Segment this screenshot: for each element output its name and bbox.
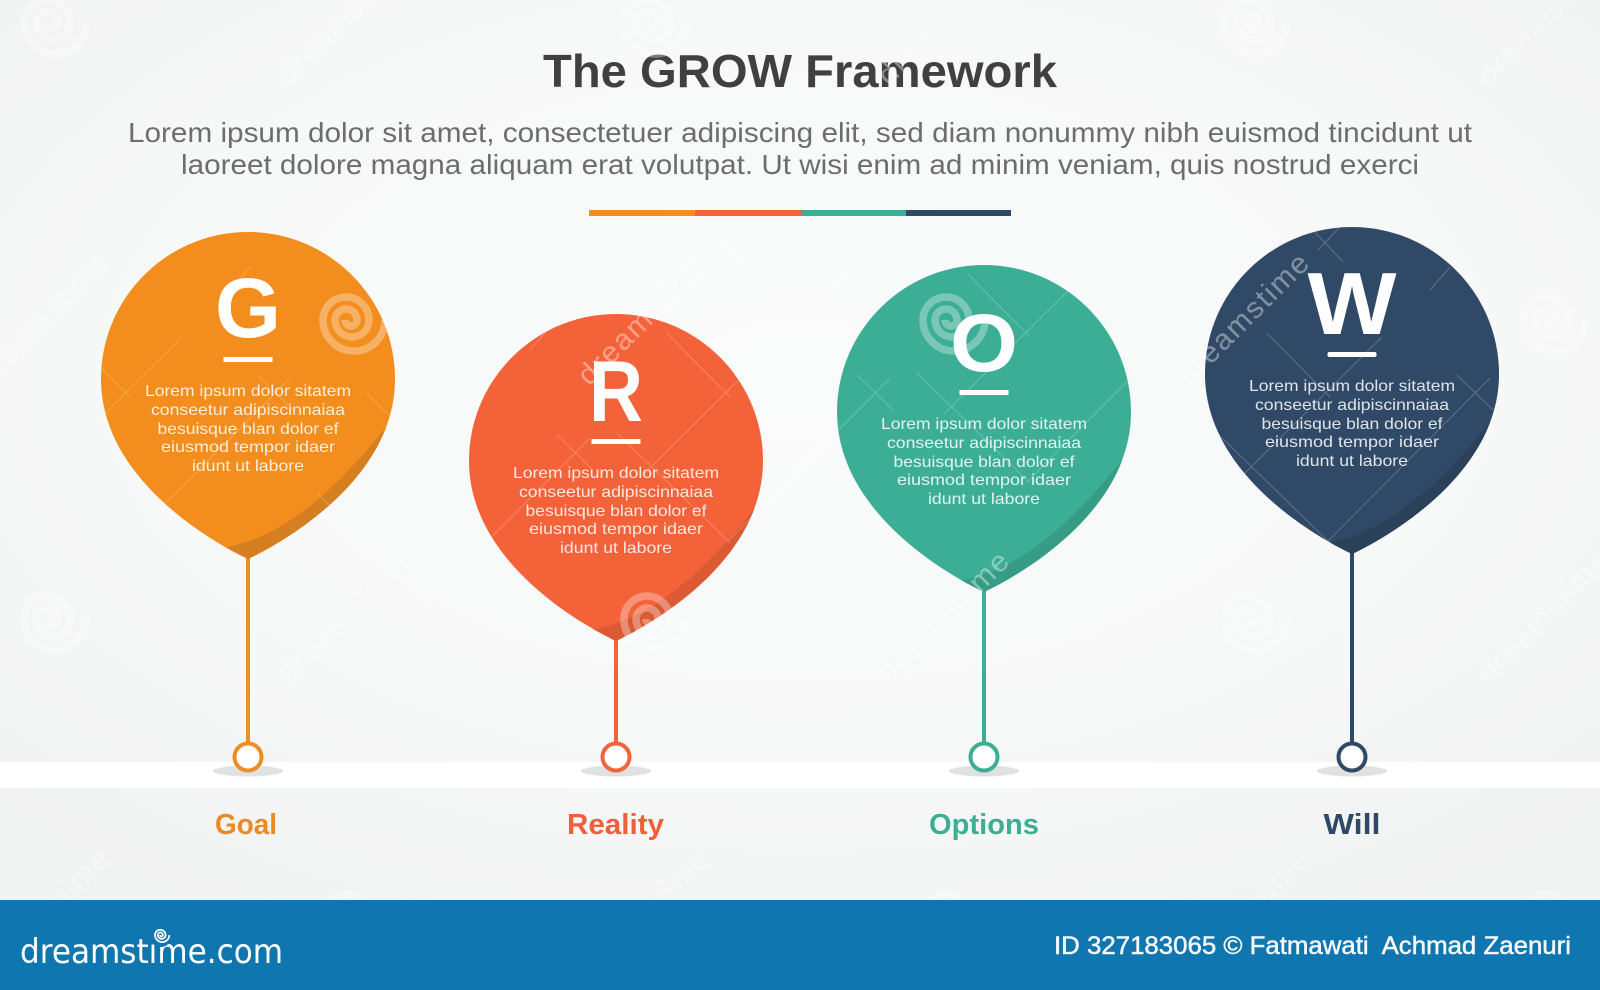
balloon: W: eiusmod tempor idaer: [1265, 434, 1440, 451]
balloon: O: eiusmod tempor idaer: [897, 472, 1072, 489]
subtitle text: [128, 117, 1472, 180]
balloon: W: conseetur adipiscinnaiaa: [1255, 397, 1449, 414]
white floor band: [0, 762, 1600, 788]
balloon: O: Lorem ipsum dolor sitatem: [881, 416, 1087, 433]
balloon: G: G: [215, 261, 281, 355]
panel: Will: [1205, 227, 1517, 841]
balloon: W: W: [1308, 254, 1396, 353]
label: Will: Will: [1324, 809, 1380, 841]
balloon: G: eiusmod tempor idaer: [161, 439, 336, 456]
balloon: W: idunt ut labore: [1296, 453, 1408, 470]
panel: Goal: [101, 232, 413, 841]
footer logo: dreamstime.com: [20, 932, 283, 972]
balloon: R: besuisque blan dolor ef: [526, 503, 707, 520]
watermark text: dreamstime: [271, 545, 416, 690]
balloon: R: idunt ut labore: [560, 540, 672, 557]
stem and ring: Options: [949, 590, 1019, 776]
watermark text: dreamstime: [871, 545, 1016, 690]
balloon: R: conseetur adipiscinnaiaa: [519, 484, 713, 501]
subtitle text: laoreet dolore magna aliquam erat volutpat. Ut wisi enim ad minim veniam, quis nostrud exerci: [181, 149, 1419, 180]
balloon: W: besuisque blan dolor ef: [1262, 416, 1443, 433]
watermark text: dreamstime: [571, 247, 716, 392]
watermark text: dreamstime: [571, 843, 716, 988]
balloon: W: Lorem ipsum dolor sitatem: [1249, 378, 1455, 395]
panel: Options: [837, 265, 1149, 841]
panel: Reality: [469, 314, 781, 841]
subtitle text: Lorem ipsum dolor sit amet, consectetuer adipiscing elit, sed diam nonummy nibh euismod tincidunt ut: [128, 117, 1472, 148]
balloon: O: idunt ut labore: [928, 491, 1040, 508]
balloon: W: [1205, 227, 1517, 572]
stem and ring: Will: [1317, 552, 1387, 776]
balloon: R: R: [589, 344, 643, 440]
balloon: G: Lorem ipsum dolor sitatem: [145, 383, 351, 400]
balloon: O: conseetur adipiscinnaiaa: [887, 435, 1081, 452]
balloon: R: Lorem ipsum dolor sitatem: [513, 465, 719, 482]
label: Options: Options: [929, 809, 1039, 841]
balloon: O: O: [950, 298, 1018, 389]
stem and ring: Reality: [581, 638, 651, 776]
balloon: G: [101, 232, 413, 577]
watermark text: dreamstime: [1171, 247, 1316, 392]
watermark text: dreamstime: [1171, 843, 1316, 988]
balloon: G: conseetur adipiscinnaiaa: [151, 402, 345, 419]
footer bar: [0, 900, 1600, 990]
stem and ring: Goal: [213, 556, 283, 776]
balloon: G: besuisque blan dolor ef: [158, 421, 339, 438]
balloon: R: [469, 314, 781, 659]
title: The GROW Framework: [543, 45, 1057, 97]
balloon: O: besuisque blan dolor ef: [894, 454, 1075, 471]
balloon: R: eiusmod tempor idaer: [529, 521, 704, 538]
divider: four colour bar: [589, 210, 1011, 216]
watermark thin lines: [17, 167, 1493, 603]
balloon: G: idunt ut labore: [192, 458, 304, 475]
label: Goal: Goal: [215, 809, 277, 841]
label: Reality: Reality: [567, 809, 664, 841]
balloon: O: [837, 265, 1149, 610]
footer credit: ID 327183065 © Fatmawati Achmad Zaenuri: [1054, 932, 1571, 960]
